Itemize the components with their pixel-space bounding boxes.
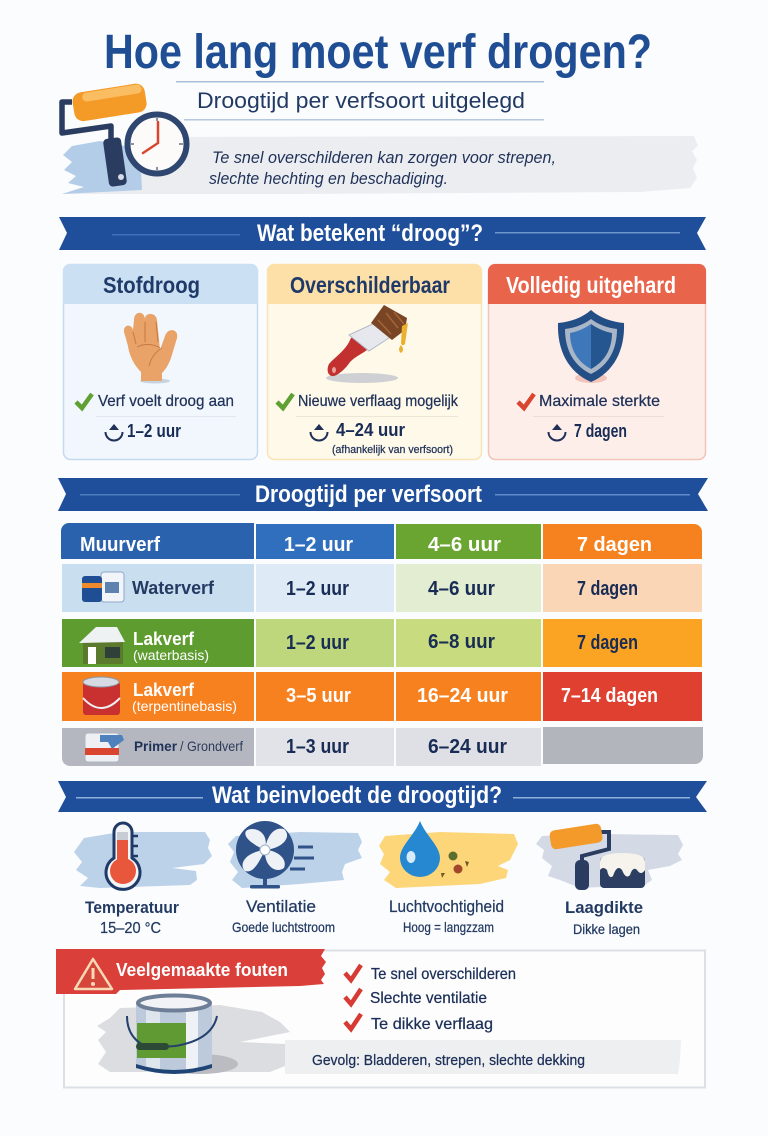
table: droogtijd per verfsoort (61, 523, 703, 766)
icon: shield (558, 310, 624, 383)
duration: 4–24 uur (336, 420, 405, 440)
intro text on brush stroke (62, 136, 698, 194)
brush stroke (74, 832, 212, 888)
factor: temperatuur: Temperatuur (85, 898, 179, 917)
duration (106, 421, 181, 441)
icon: primer can (85, 733, 124, 762)
panel: overschilderbaar (267, 264, 482, 460)
factor: laagdikte (536, 823, 683, 937)
card title: Stofdroog (103, 272, 200, 298)
row: primer grondverf: / Grondverf (180, 738, 243, 754)
row: lakverf waterbasis: Lakverf (133, 629, 195, 649)
intro text on brush stroke: Te snel overschilderen kan zorgen voor strepen, (212, 148, 556, 167)
icon: red can (83, 677, 120, 715)
icon highlight (406, 851, 416, 863)
table header row: 1–2 uur (284, 534, 353, 556)
icon: debris (441, 852, 469, 878)
factor: temperatuur: 15–20 °C (100, 920, 161, 937)
brush stroke (228, 832, 362, 888)
mistakes list: Slechte ventilatie (370, 990, 487, 1007)
factor: laagdikte: Laagdikte (565, 898, 643, 917)
row: lakverf terpentinebasis: 16–24 uur (417, 685, 508, 707)
panel: stofdroog (63, 264, 258, 460)
factor: ventilatie (228, 821, 362, 935)
mistakes list (345, 965, 516, 1033)
panel: volledig uitgehard (488, 264, 706, 460)
icon: water drop (400, 821, 440, 877)
row: waterverf: 7 dagen (577, 578, 638, 600)
row: lakverf waterbasis: 1–2 uur (286, 632, 349, 654)
icon: paint can (127, 996, 238, 1074)
factor: luchtvochtigheid: Hoog = langzzam (403, 919, 494, 935)
duration (310, 420, 453, 456)
table header row: 7 dagen (577, 534, 652, 556)
row: lakverf terpentinebasis: Lakverf (133, 680, 195, 700)
row: waterverf: 1–2 uur (286, 578, 349, 600)
factor: luchtvochtigheid (379, 821, 518, 935)
brush stroke (536, 834, 683, 888)
row: primer grondverf: 1–3 uur (286, 736, 349, 758)
row: lakverf terpentinebasis: (terpentinebasis) (132, 698, 237, 714)
subtitle: Droogtijd per verfsoort uitgelegd (197, 88, 525, 113)
icon: hand (124, 313, 177, 384)
icon: paint roller with clock (62, 82, 186, 187)
row: waterverf: Waterverf (132, 578, 215, 598)
mistakes list: Te snel overschilderen (371, 966, 516, 983)
card header (488, 264, 706, 304)
factor: temperatuur (74, 823, 212, 937)
section banner: wat beinvloedt de droogtijd (58, 781, 707, 812)
row: lakverf terpentinebasis: 3–5 uur (286, 685, 351, 707)
icon: roller and paint pot (549, 823, 645, 890)
card header (267, 264, 482, 304)
row: lakverf waterbasis: 6–8 uur (428, 631, 495, 653)
section banner: droogtijd per verfsoort (58, 478, 708, 511)
card title: Volledig uitgehard (506, 272, 676, 298)
factor: ventilatie: Goede luchtstroom (232, 919, 335, 935)
duration: 7 dagen (574, 421, 627, 441)
intro text on brush stroke: slechte hechting en beschadiging. (209, 169, 448, 188)
table header row (61, 523, 702, 559)
section banner: wat betekent droog (59, 217, 706, 250)
check line: Verf voelt droog aan (98, 393, 234, 410)
check line: Maximale sterkte (539, 393, 660, 410)
row: primer grondverf (62, 727, 703, 766)
row: primer grondverf: 6–24 uur (428, 736, 507, 758)
consequence text: Gevolg: Bladderen, strepen, slechte dekking (312, 1052, 585, 1069)
table header row: 4–6 uur (428, 534, 501, 556)
row: lakverf waterbasis (62, 619, 702, 667)
duration (548, 421, 627, 441)
check line: Nieuwe verflaag mogelijk (298, 393, 459, 410)
factor: laagdikte: Dikke lagen (573, 921, 640, 937)
card title: Overschilderbaar (290, 272, 450, 298)
icon: waterverf can (82, 572, 124, 602)
section banner: wat beinvloedt de droogtijd: Wat beinvloedt de droogtijd? (212, 782, 502, 809)
row: lakverf terpentinebasis (62, 672, 702, 721)
icon: house (79, 627, 125, 664)
mistakes list: Te dikke verflaag (371, 1016, 493, 1033)
icon: warning triangle (75, 959, 112, 989)
duration: (afhankelijk van verfsoort) (332, 444, 453, 456)
card header (63, 264, 258, 304)
table header row: Muurverf (80, 534, 160, 556)
row: lakverf waterbasis: (waterbasis) (133, 647, 209, 663)
title: Hoe lang moet verf drogen? (104, 26, 652, 79)
row: lakverf terpentinebasis: 7–14 dagen (561, 685, 658, 707)
consequence band (285, 1040, 681, 1074)
row: waterverf (62, 564, 702, 612)
warning banner: Veelgemaakte fouten (116, 960, 288, 980)
factor: luchtvochtigheid: Luchtvochtigheid (389, 897, 504, 916)
section banner: droogtijd per verfsoort: Droogtijd per verfsoort (255, 481, 482, 508)
row: lakverf waterbasis: 7 dagen (577, 632, 638, 654)
brush stroke (379, 832, 518, 888)
factor: ventilatie: Ventilatie (246, 897, 316, 916)
panel: veelgemaakte fouten (56, 949, 705, 1088)
icon: paint brush (326, 305, 408, 383)
icon: thermometer (106, 823, 140, 889)
row: waterverf: 4–6 uur (428, 578, 495, 600)
warning banner (56, 949, 326, 994)
duration: 1–2 uur (127, 421, 181, 441)
section banner: wat betekent droog: Wat betekent “droog”? (257, 220, 483, 247)
brush stroke behind can (97, 1005, 290, 1072)
icon: fan (236, 821, 314, 888)
row: primer grondverf: Primer (134, 738, 178, 754)
